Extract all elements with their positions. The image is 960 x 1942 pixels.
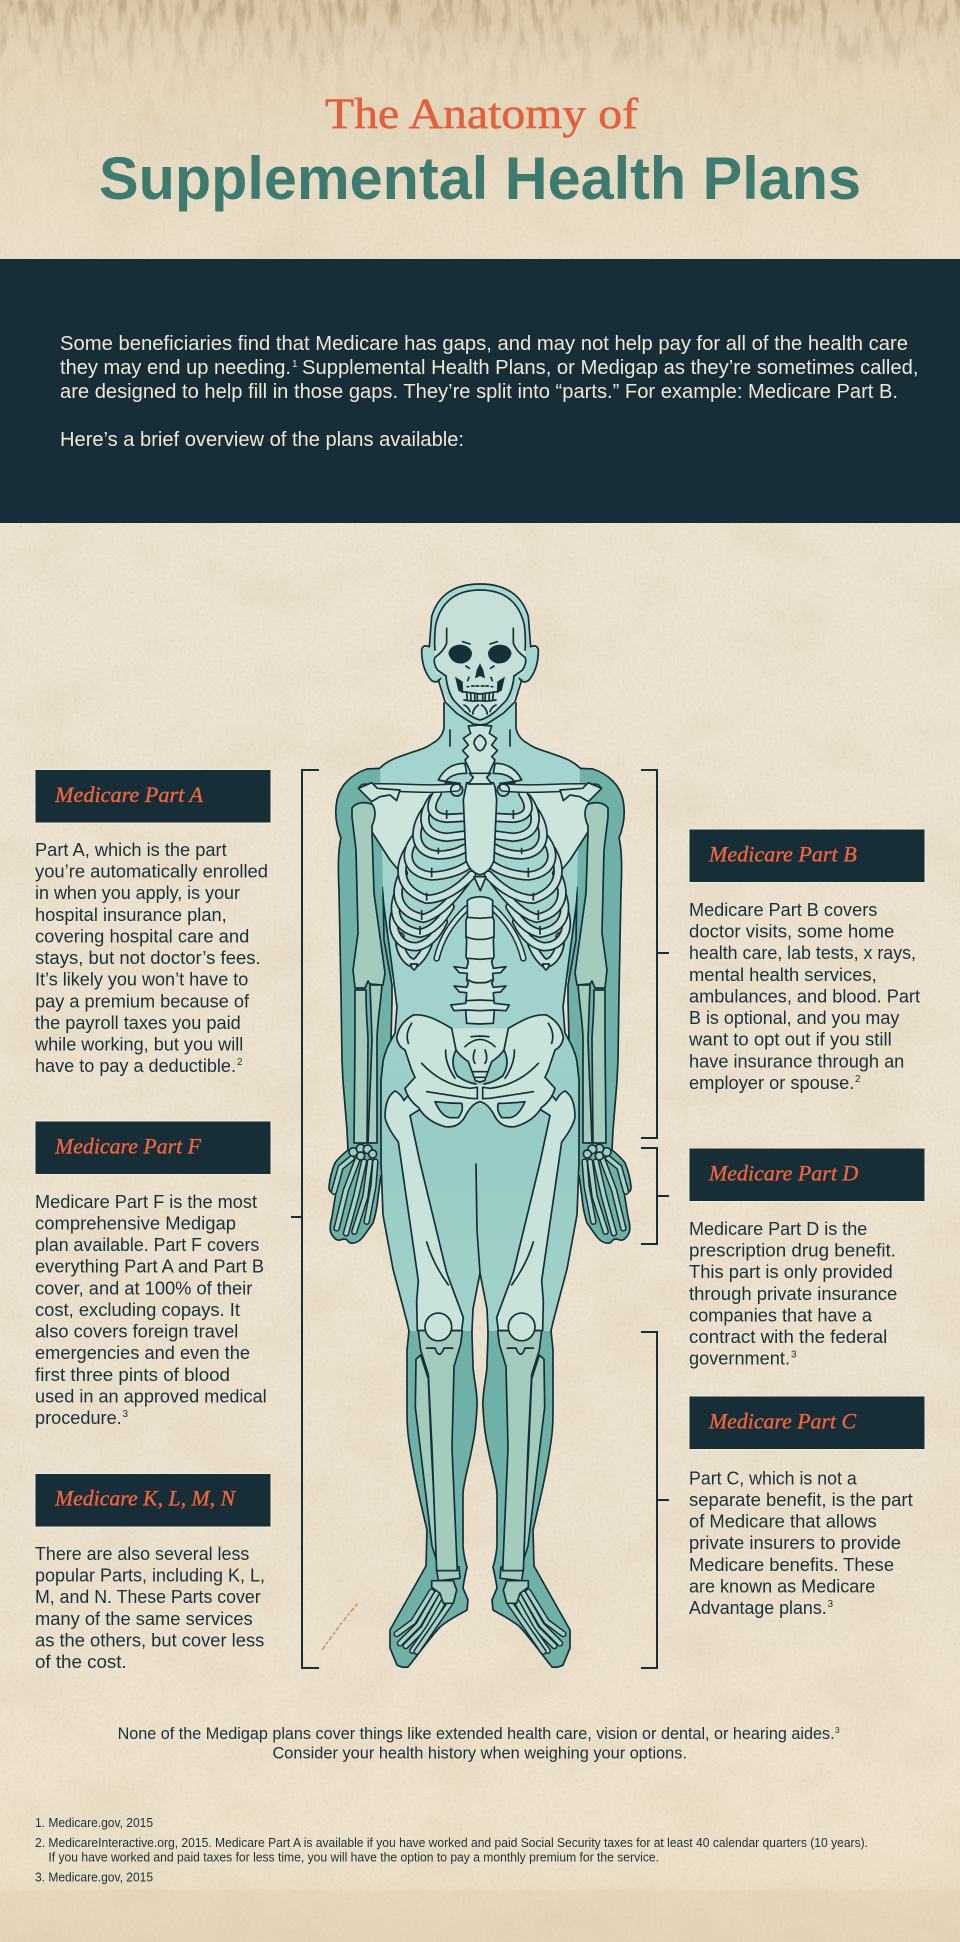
body text: [688, 900, 920, 1093]
intro text: 1: [292, 359, 298, 370]
heading box: [35, 770, 271, 823]
body text: popular Parts, including K, L,: [35, 1566, 265, 1586]
body text: used in an approved medical: [35, 1386, 267, 1406]
intro text: Some beneficiaries find that Medicare has gaps, and may not help pay for all of the health care: [60, 332, 908, 355]
footnotes: If you have worked and paid taxes for less time, you will have the option to pay a monthly premium for the service.: [48, 1849, 659, 1864]
body text: stays, but not doctor’s fees.: [35, 948, 261, 968]
body text: cover, and at 100% of their: [35, 1278, 252, 1298]
panel: Medicare K, L, M, N: [35, 1474, 271, 1672]
body text: plan available. Part F covers: [35, 1235, 259, 1255]
body text: have insurance through an: [689, 1051, 904, 1071]
forearm bones: [354, 990, 368, 1143]
heading box: Medicare Part C: [708, 1408, 856, 1433]
body text: of Medicare that allows: [689, 1512, 877, 1532]
body text: It’s likely you won’t have to: [35, 970, 248, 990]
heading box: Medicare K, L, M, N: [54, 1486, 236, 1511]
heading box: [689, 829, 925, 882]
hand bones: [334, 1144, 377, 1233]
heading box: Medicare Part F: [54, 1134, 202, 1158]
bracket: right Part B: [641, 770, 669, 1138]
body text: doctor visits, some home: [689, 922, 894, 942]
heading box: Medicare Part B: [708, 842, 857, 867]
body text: health care, lab tests, x rays,: [689, 943, 916, 963]
body text: through private insurance: [689, 1284, 897, 1304]
body text: 3: [791, 1350, 797, 1360]
body text: Medicare benefits. These: [689, 1555, 894, 1575]
body text: procedure.: [35, 1408, 122, 1428]
body text: are known as Medicare: [689, 1576, 875, 1596]
body text: prescription drug benefit.: [689, 1241, 896, 1261]
body text: This part is only provided: [689, 1262, 893, 1282]
body text: many of the same services: [35, 1609, 253, 1629]
rib cage: [358, 763, 472, 970]
heading box: [35, 1474, 271, 1527]
body text: have to pay a deductible.: [35, 1056, 236, 1076]
clavicle: [363, 787, 457, 789]
body text: B is optional, and you may: [689, 1008, 899, 1028]
foot bones: [397, 1567, 460, 1652]
arm silhouette: [329, 768, 392, 1243]
body text: contract with the federal: [689, 1327, 887, 1347]
body text: Medicare Part B covers: [689, 900, 877, 920]
body text: government.: [689, 1349, 790, 1369]
body text: [689, 1219, 897, 1369]
skeleton figure: [329, 584, 631, 1667]
body text: Medicare Part D is the: [689, 1219, 867, 1239]
heading box: Medicare Part A: [54, 782, 204, 807]
panel: Medicare Part C: [689, 1396, 925, 1618]
body text: [34, 840, 268, 1076]
body text: as the others, but cover less: [35, 1630, 264, 1650]
brackets: [291, 770, 669, 1668]
body text: while working, but you will: [34, 1035, 243, 1055]
torso and thigh silhouette: [380, 703, 480, 1331]
body text: in when you apply, is your: [35, 883, 240, 903]
body text: 2: [237, 1057, 243, 1068]
body text: first three pints of blood: [35, 1365, 230, 1385]
closing note: [118, 1724, 840, 1763]
footnotes: 3. Medicare.gov, 2015: [35, 1869, 153, 1884]
panel: Medicare Part F: [35, 1121, 271, 1428]
body text: you’re automatically enrolled: [35, 862, 268, 882]
closing note: Consider your health history when weighing your options.: [272, 1744, 687, 1763]
body text: also covers foreign travel: [35, 1322, 238, 1342]
body text: cost, excluding copays. It: [35, 1300, 240, 1320]
body text: Part C, which is not a: [689, 1468, 858, 1488]
body text: covering hospital care and: [35, 926, 249, 946]
skull half: [421, 584, 480, 727]
heading box: [689, 1396, 925, 1450]
body text: everything Part A and Part B: [35, 1257, 264, 1277]
body text: There are also several less: [35, 1544, 249, 1564]
body text: Medicare Part F is the most: [35, 1192, 257, 1212]
panel: Medicare Part D: [689, 1148, 925, 1369]
body text: pay a premium because of: [35, 991, 250, 1011]
footnotes: 2. MedicareInteractive.org, 2015. Medicare Part A is available if you have worked and paid Social Security taxes for at least 40 calendar quarters (10 years).: [35, 1835, 868, 1850]
neck vertebra: [450, 725, 480, 780]
body text: private insurers to provide: [689, 1533, 901, 1553]
bracket: right Part C: [641, 1332, 669, 1668]
body text: hospital insurance plan,: [35, 905, 227, 925]
body text: comprehensive Medigap: [35, 1213, 236, 1233]
body text: M, and N. These Parts cover: [35, 1587, 261, 1607]
closing note: None of the Medigap plans cover things like extended health care, vision or dental, or hearing aides.: [118, 1724, 835, 1743]
panel: Medicare Part A: [34, 770, 271, 1076]
title line: Supplemental Health Plans: Supplemental Health Plans: [99, 145, 861, 212]
thigh centre line: [476, 1164, 480, 1273]
femur and lower leg bones: [385, 1091, 463, 1571]
bracket: right Part D: [641, 1148, 669, 1244]
body text: companies that have a: [689, 1306, 873, 1326]
humerus: [352, 803, 385, 988]
body text: [35, 1192, 267, 1428]
body text: mental health services,: [689, 965, 877, 985]
body text: 3: [122, 1409, 128, 1420]
body text: ambulances, and blood. Part: [689, 986, 920, 1006]
sternum: [463, 773, 497, 891]
closing note: 3: [835, 1725, 840, 1735]
intro text: [60, 332, 918, 451]
intro text: they may end up needing.: [60, 356, 291, 379]
footnotes: [35, 1815, 868, 1884]
pelvis: [397, 1015, 480, 1127]
body text: Advantage plans.: [689, 1598, 827, 1618]
heading box: Medicare Part D: [708, 1161, 858, 1186]
panel: Medicare Part B: [688, 829, 925, 1093]
body text: Part A, which is the part: [35, 840, 227, 860]
body text: [689, 1468, 913, 1618]
scapula light area: [372, 790, 432, 872]
shin and foot silhouette: [390, 1331, 477, 1667]
heading box: [689, 1148, 925, 1202]
title line: The Anatomy of: The Anatomy of: [325, 91, 639, 138]
body text: [35, 1544, 265, 1672]
body text: 3: [828, 1599, 834, 1610]
spine half: [451, 897, 480, 1024]
footnotes: 1. Medicare.gov, 2015: [35, 1815, 153, 1830]
intro band: [0, 259, 960, 523]
title: [99, 91, 861, 212]
heading box: [35, 1121, 271, 1174]
body text: of the cost.: [35, 1652, 127, 1672]
intro text: are designed to help fill in those gaps. They’re split into “parts.” For example: Medicare Part B.: [60, 380, 898, 403]
body text: 2: [855, 1074, 861, 1085]
body text: separate benefit, is the part: [689, 1490, 913, 1510]
body text: employer or spouse.: [689, 1073, 854, 1093]
body text: emergencies and even the: [35, 1343, 250, 1363]
intro text: Supplemental Health Plans, or Medigap as they’re sometimes called,: [302, 356, 918, 379]
intro text: Here’s a brief overview of the plans available:: [60, 428, 464, 451]
bracket: left: [291, 770, 319, 1668]
body text: want to opt out if you still: [688, 1030, 892, 1050]
body text: the payroll taxes you paid: [35, 1013, 241, 1033]
